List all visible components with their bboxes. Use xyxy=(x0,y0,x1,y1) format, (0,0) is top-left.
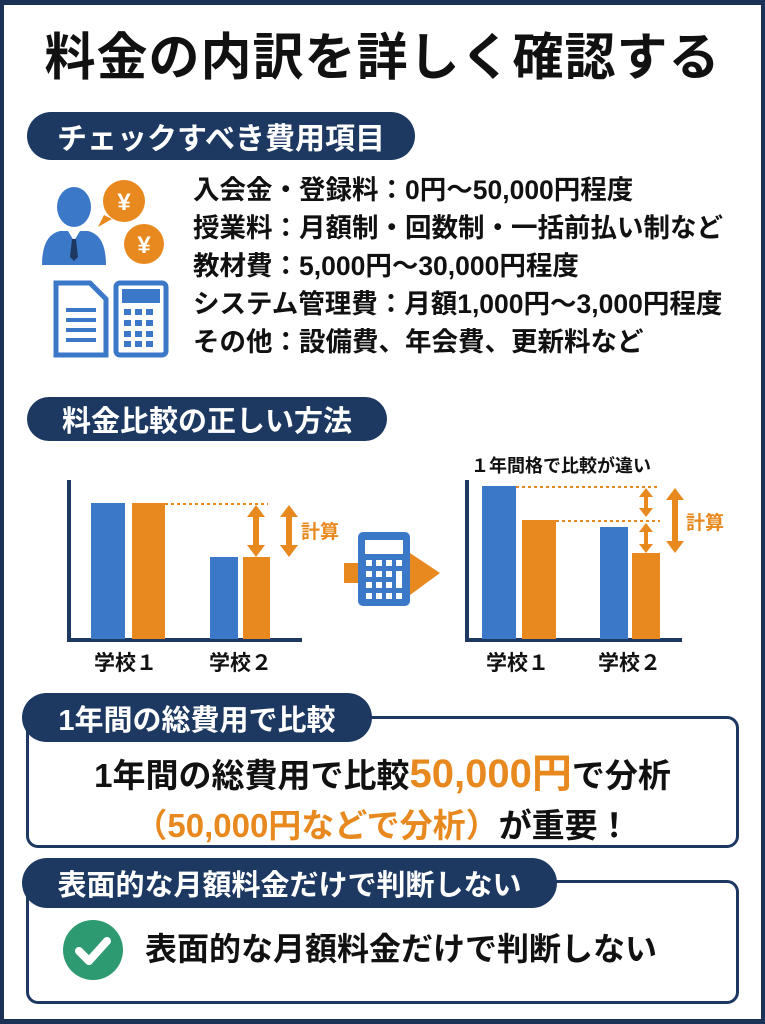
text: annual comparison message xyxy=(94,752,671,844)
list: fee items: 入会金・登録料：0円〜50,000円程度 xyxy=(193,175,633,205)
pill: check items heading: チェックすべき費用項目 xyxy=(57,123,385,156)
title: 料金の内訳を詳しく確認する xyxy=(44,29,720,86)
left chart: 学校２ xyxy=(209,652,272,675)
list: fee items xyxy=(193,175,723,357)
panel: don't judge by monthly fee xyxy=(26,880,739,1004)
text: annual comparison message: （50,000円などで分析）が重要！ xyxy=(134,807,631,844)
calculator arrow xyxy=(344,532,440,606)
left chart: 計算 xyxy=(301,520,339,543)
icon: person with yen coins, document, calculator xyxy=(42,180,168,358)
left chart: 学校１ xyxy=(94,652,157,675)
text: annual comparison message: 1年間の総費用で比較50,000円で分析 xyxy=(94,752,671,796)
text: check message: 表面的な月額料金だけで判断しない xyxy=(145,931,657,967)
chart: comparison before/after xyxy=(67,455,724,675)
left chart xyxy=(69,480,339,675)
right chart: 学校２ xyxy=(598,652,661,675)
pill: monthly fee heading xyxy=(22,858,557,908)
right chart: 学校１ xyxy=(486,652,549,675)
icon: green check xyxy=(63,920,123,980)
list: fee items: システム管理費：月額1,000円〜3,000円程度 xyxy=(193,289,722,319)
pill: monthly fee heading: 表面的な月額料金だけで判断しない xyxy=(57,870,522,902)
pill: annual total cost heading xyxy=(22,693,372,742)
pill: comparison method heading: 料金比較の正しい方法 xyxy=(62,406,352,438)
right chart xyxy=(467,455,724,675)
list: fee items: 教材費：5,000円〜30,000円程度 xyxy=(193,251,579,281)
right chart: 計算 xyxy=(686,511,724,534)
pill: check items heading xyxy=(27,112,415,160)
right chart: １年間格で比較が違い xyxy=(471,455,651,476)
icon: person with yen coins, document, calculator: ¥ xyxy=(137,232,151,259)
list: fee items: 授業料：月額制・回数制・一括前払い制など xyxy=(193,213,723,243)
panel: annual total cost xyxy=(26,716,739,848)
list: fee items: その他：設備費、年会費、更新料など xyxy=(193,327,644,357)
pill: comparison method heading xyxy=(27,397,387,441)
icon: person with yen coins, document, calculator: ¥ xyxy=(117,189,131,216)
pill: annual total cost heading: 1年間の総費用で比較 xyxy=(58,704,336,736)
